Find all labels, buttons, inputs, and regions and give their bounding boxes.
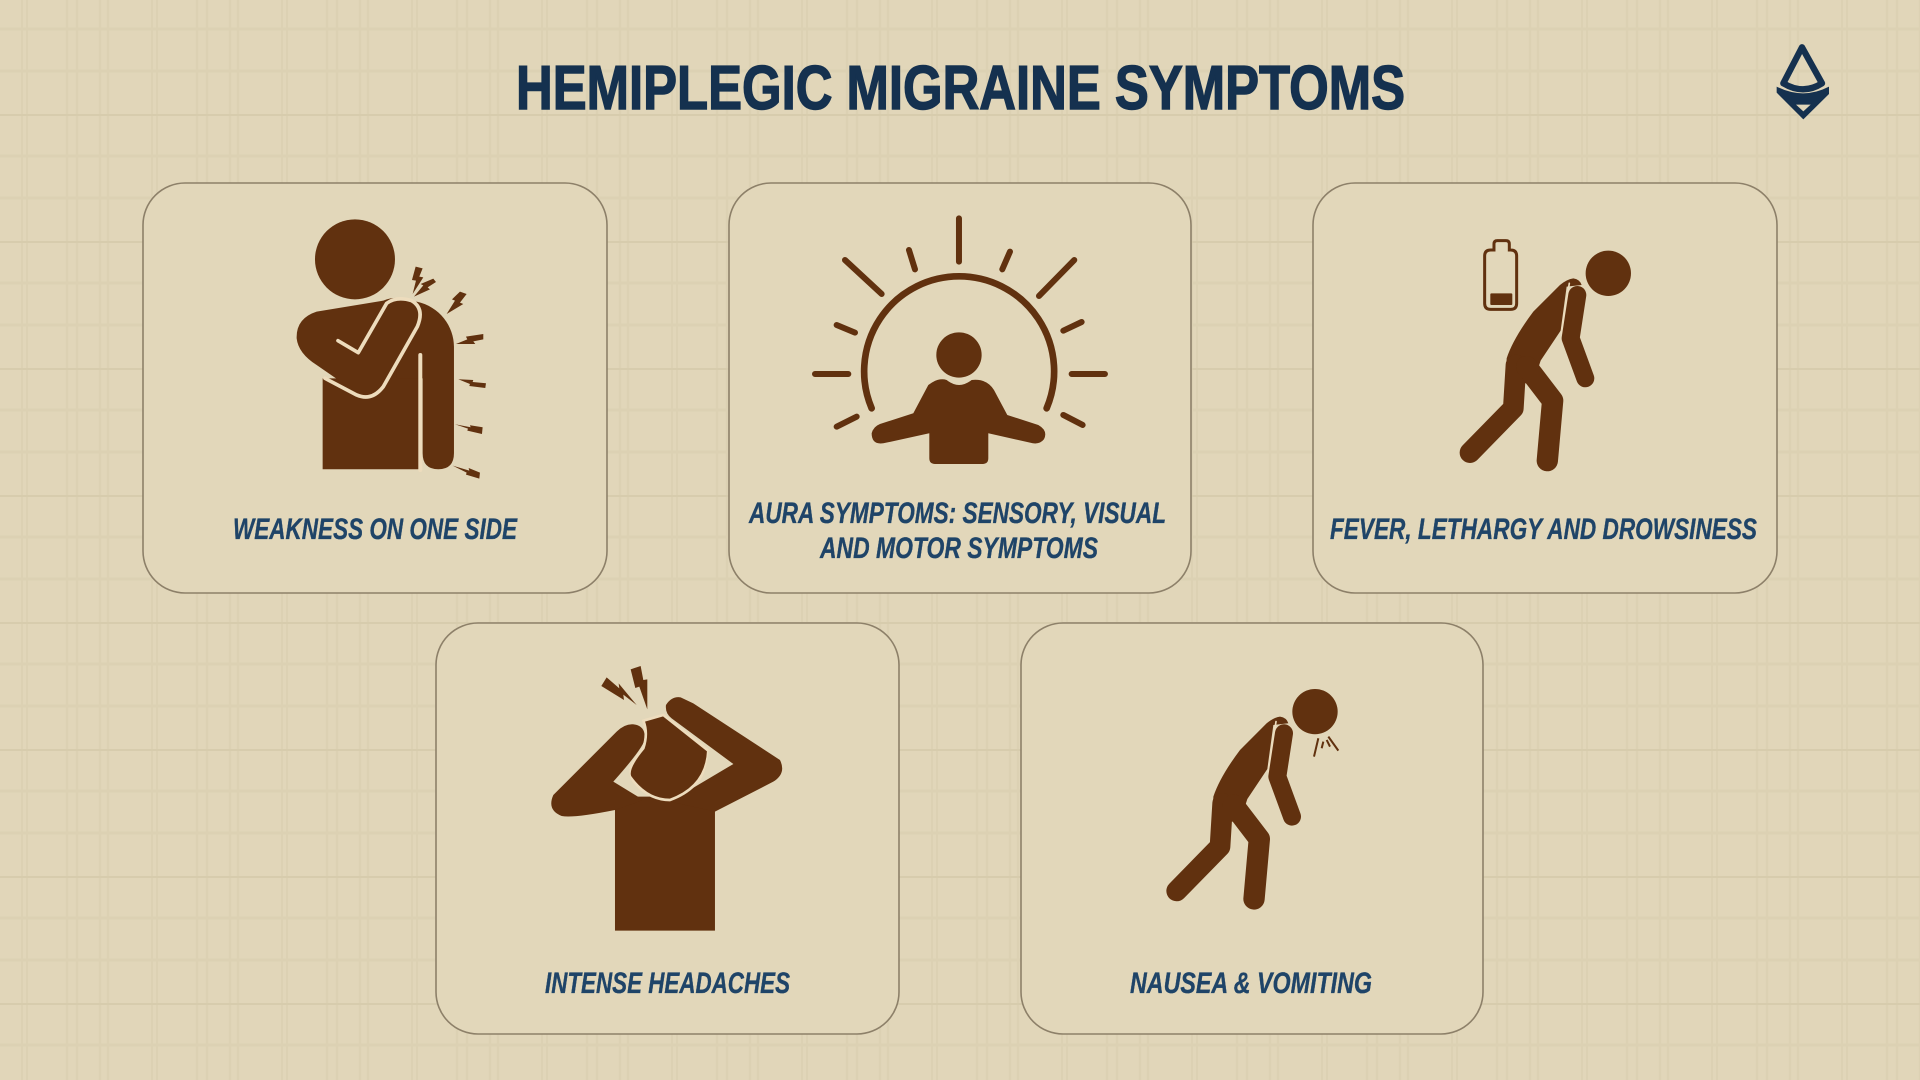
label — [748, 497, 1166, 565]
label: NAUSEA & VOMITING — [1130, 967, 1372, 1000]
title: HEMIPLEGIC MIGRAINE SYMPTOMS — [516, 54, 1405, 123]
label: WEAKNESS ON ONE SIDE — [233, 513, 518, 546]
label: AURA SYMPTOMS: SENSORY, VISUAL — [748, 497, 1166, 530]
label: FEVER, LETHARGY AND DROWSINESS — [1330, 513, 1757, 546]
panel: nausea and vomiting — [1021, 623, 1483, 1034]
panel: weakness on one side — [143, 183, 607, 593]
icon: person with aura arc and rays — [815, 218, 1105, 464]
panel: intense headaches — [436, 623, 899, 1034]
label: AND MOTOR SYMPTOMS — [819, 532, 1098, 565]
icon: tired person with low battery — [1470, 241, 1631, 461]
icon: logo — [1777, 47, 1829, 119]
icon: bent person vomiting — [1177, 689, 1338, 899]
panel: fever, lethargy and drowsiness — [1313, 183, 1777, 593]
icon: low battery — [1485, 241, 1517, 309]
icon: person holding head — [551, 666, 782, 931]
icon: person holding shoulder — [297, 219, 486, 479]
panel: aura symptoms — [729, 183, 1191, 593]
label: INTENSE HEADACHES — [545, 967, 790, 1000]
